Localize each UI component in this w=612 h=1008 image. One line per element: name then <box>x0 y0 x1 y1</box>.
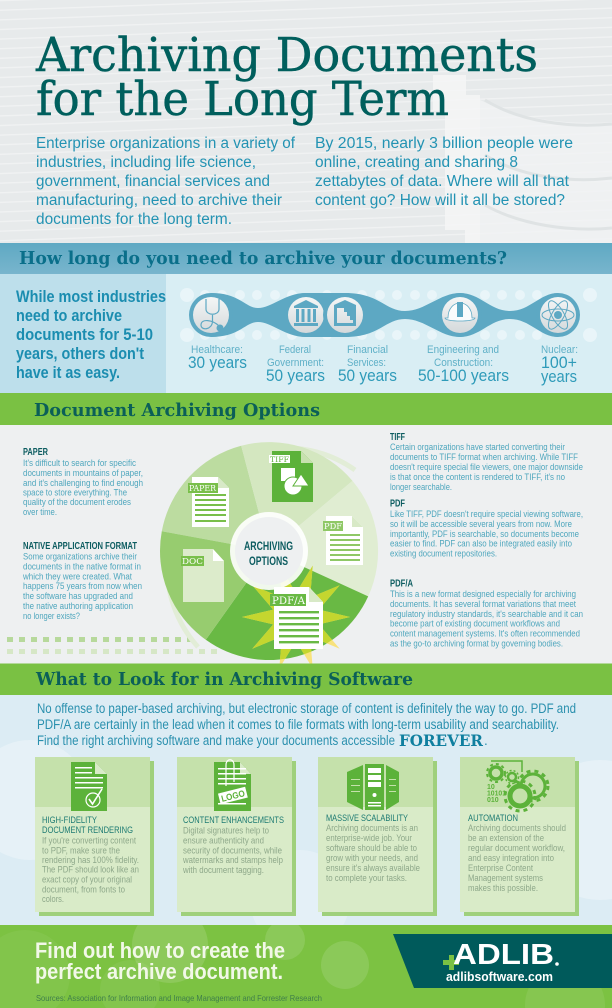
centre label: OPTIONS <box>249 554 288 568</box>
icon: tiff document <box>269 451 313 502</box>
card: automation: and easy integration into <box>468 853 554 863</box>
software intro paragraph: Find the right archiving software and make your documents accessible <box>37 733 395 748</box>
section band: archiving options <box>0 393 612 425</box>
label: engineering and construction: Engineering and <box>427 344 499 356</box>
title: Archiving Documents <box>35 28 538 83</box>
text block: tiff: TIFF <box>390 432 405 443</box>
software intro paragraph: . <box>484 733 488 748</box>
icon: financial building <box>323 293 367 337</box>
text block: native application format: documents in the native format in <box>23 562 141 572</box>
card: high-fidelity rendering: DOCUMENT RENDERING <box>42 825 133 836</box>
text block: native application format: which they were created. What <box>22 572 132 582</box>
icon: hard hat <box>438 293 482 337</box>
text block: pdf: importantly, PDF is searchable, so documents become <box>390 529 579 539</box>
label: nuclear: Nuclear: <box>541 344 578 356</box>
card: massive scalability: grow with your needs, and <box>326 853 418 863</box>
intro text: right column: By 2015, nearly 3 billion people were <box>315 135 573 152</box>
label: financial services <box>338 344 397 385</box>
icon: paper document <box>188 477 229 527</box>
icon: paper document: PAPER <box>189 484 217 494</box>
icon: gears and binary: 10101 <box>487 790 506 798</box>
call to action: perfect archive document. <box>35 959 283 984</box>
intro text: right column <box>315 135 573 209</box>
header background with database motif <box>0 0 612 243</box>
slice: doc <box>160 531 269 640</box>
text block: pdf: existing document repositories. <box>390 548 497 558</box>
intro text: right column: zettabytes of data. Where will all that <box>315 173 570 190</box>
text block: paper <box>23 447 143 517</box>
intro text: right column: content go? How will it all be stored? <box>315 192 565 209</box>
label: financial services: 50 years <box>338 366 397 385</box>
text block: native application format: happens 75 years from now when <box>23 581 142 591</box>
text block: tiff: doesn't require special file viewers, one major downside <box>390 462 583 472</box>
label: nuclear: 100+ <box>541 353 577 372</box>
text block: tiff <box>390 432 583 492</box>
icon: doc document: DOC <box>182 557 203 566</box>
label: federal government <box>266 344 325 385</box>
label: federal government: Federal <box>279 344 311 356</box>
logo banner: ADLIB: adlibsoftware.com <box>446 969 553 984</box>
label: engineering and construction <box>418 344 509 385</box>
text block: pdf/a: PDF/A <box>390 578 413 590</box>
text block: pdf/a: This is a new format designed especially for archiving <box>390 589 576 599</box>
text block: pdf: so it will be accessible several years from now. More <box>390 519 572 529</box>
footer background with bokeh <box>0 925 612 1008</box>
text block: native application format: no longer exists? <box>23 611 80 621</box>
panel: retention intro: have it as easy. <box>16 363 120 382</box>
icon: pdf/a document: PDF/A <box>272 596 306 607</box>
card: massive scalability <box>318 757 437 916</box>
label: nuclear <box>541 344 578 386</box>
section band: software: What to Look for in Archiving Software <box>35 669 413 690</box>
text block: tiff: longer searchable. <box>390 482 452 492</box>
icon: doc document <box>181 549 224 602</box>
label: nuclear: years <box>541 367 577 386</box>
text block: pdf: Like TIFF, PDF doesn't require special viewing software, <box>390 509 583 519</box>
card: automation: Management systems <box>468 873 543 883</box>
card: high-fidelity rendering: colors. <box>42 894 64 904</box>
card: massive scalability: Archiving documents is an <box>326 823 418 833</box>
text block: tiff: is that once the content is rendered to TIFF, it's no <box>390 472 565 482</box>
text block: pdf: easier to find. PDF can also be integrated easily into <box>390 538 572 548</box>
panel: retention intro: years, others don't <box>16 344 144 363</box>
intro text: left column: government, financial services and <box>36 173 270 190</box>
slice: tiff <box>241 442 352 551</box>
text block: tiff: Certain organizations have started converting their <box>390 442 565 452</box>
intro text: left column <box>36 135 296 228</box>
icon: tiff document: TIFF <box>270 456 289 464</box>
panel: retention intro: documents for 5-10 <box>16 325 153 344</box>
software intro paragraph: FOREVER <box>399 731 484 750</box>
call to action <box>35 938 285 984</box>
text block: native application format: the software has upgraded and <box>23 591 133 601</box>
icon: checked document <box>71 762 107 811</box>
text block: native application format <box>22 541 142 621</box>
card: massive scalability: to complete your tasks. <box>326 873 407 883</box>
icon: government building <box>284 293 328 337</box>
text block: native application format: the native authoring application <box>23 601 133 611</box>
centre label: ARCHIVING <box>244 539 293 553</box>
intro text: left column: documents for the long term. <box>36 211 232 228</box>
text block: native application format: NATIVE APPLICATION FORMAT <box>23 541 137 552</box>
intro text: left column: Enterprise organizations in a variety of <box>36 135 296 152</box>
card: massive scalability: enterprise-wide job. Your <box>326 833 412 843</box>
intro text: left column: manufacturing, need to archive their <box>36 192 282 209</box>
card: high-fidelity rendering: rendering has 100% fidelity. <box>42 855 139 865</box>
card: content enhancements: security of documents, while <box>183 846 282 856</box>
icon: atom <box>536 293 580 337</box>
options panel background <box>0 393 612 664</box>
card: automation: Archiving documents should <box>468 823 566 833</box>
icon: pdf document: PDF <box>324 522 342 531</box>
card: content enhancements: ensure authenticity and <box>183 836 264 846</box>
starburst <box>242 566 350 668</box>
icon: document with clip and logo stamp <box>214 760 251 811</box>
chain connector <box>211 293 558 337</box>
label: financial services: Services: <box>347 357 386 369</box>
panel: retention intro: While most industries <box>16 287 166 306</box>
icon: document with clip and logo stamp: LOGO <box>220 788 246 804</box>
sources: Sources: Association for Information and Image Management and Forrester Research <box>36 993 322 1003</box>
text block: pdf/a: become part of existing document workflows and <box>390 618 560 628</box>
card: massive scalability: software should be able to <box>326 843 417 853</box>
label: healthcare: 30 years <box>188 353 247 372</box>
text block: pdf <box>390 498 583 558</box>
title: for the Long Term <box>36 72 449 127</box>
section band: archiving options: Document Archiving Options <box>34 400 320 421</box>
text block: native application format: Some organizations archive their <box>23 552 137 562</box>
text block: paper: quality of the document erodes <box>23 497 131 507</box>
section band: software <box>0 664 612 695</box>
icon: server rack <box>347 764 399 810</box>
text block: pdf/a: documents. It has several format variations that meet <box>390 599 576 609</box>
section band: how long <box>0 243 612 274</box>
text block: paper: space to store everything. The <box>23 488 127 498</box>
text block: pdf/a: content management systems. It's often recommended <box>390 628 580 638</box>
card: automation <box>460 757 579 916</box>
card: massive scalability: MASSIVE SCALABILITY <box>326 813 409 824</box>
label: engineering and construction: Construction: <box>434 357 493 369</box>
intro text: left column: industries, including life science, <box>36 154 256 171</box>
card: content enhancements: Digital signatures help to <box>183 826 269 836</box>
label: federal government: 50 years <box>266 366 325 385</box>
card: high-fidelity rendering: exact copy of your original <box>42 874 132 884</box>
card: automation: makes this possible. <box>468 883 538 893</box>
text block: paper: PAPER <box>23 447 49 458</box>
panel: retention intro <box>0 274 166 393</box>
label: healthcare: Healthcare: <box>191 344 243 356</box>
icon: gears and binary: 10 <box>487 784 495 791</box>
call to action: Find out how to create the <box>35 938 285 963</box>
software intro paragraph <box>37 701 576 750</box>
card: high-fidelity rendering: HIGH-FIDELITY <box>42 815 98 826</box>
icon: pdf document <box>323 516 363 565</box>
intro text: right column: online, creating and sharing 8 <box>315 154 518 171</box>
card: high-fidelity rendering: The PDF should look like an <box>42 864 139 874</box>
card: high-fidelity rendering: to PDF, make sure the <box>42 846 120 856</box>
panel: retention timeline <box>166 274 612 393</box>
title <box>35 28 538 127</box>
card: automation: AUTOMATION <box>468 813 518 824</box>
text block: pdf/a: regulatory industry standards, it's searchable and it can <box>390 609 583 619</box>
text block: paper: over time. <box>23 507 57 517</box>
dotted strip <box>7 637 217 654</box>
card: content enhancements: watermarks and stamps help <box>182 855 283 865</box>
card: automation: Enterprise Content <box>468 863 533 873</box>
card: automation: regular document workflow, <box>468 843 565 853</box>
icon: stethoscope <box>189 293 233 337</box>
text block: pdf/a: as the go-to archiving format by governing bodies. <box>390 638 563 648</box>
panel: retention intro: need to archive <box>16 306 122 325</box>
card: content enhancements: CONTENT ENHANCEMENTS <box>183 815 284 826</box>
label: federal government: Government: <box>267 357 324 369</box>
card: high-fidelity rendering <box>35 757 154 916</box>
icon: plus mark <box>443 955 459 970</box>
section band: how long: How long do you need to archive your documents? <box>19 248 507 269</box>
label: engineering and construction: 50-100 years <box>418 366 509 385</box>
software section background <box>0 695 612 950</box>
text block: paper: and it's challenging to find enough <box>23 478 143 488</box>
text block: paper: documents in mountains of paper, <box>23 468 143 478</box>
card: automation: be an extension of the <box>468 833 544 843</box>
card: high-fidelity rendering: document, from fonts to <box>42 884 125 894</box>
slice: pdf/a <box>206 551 368 660</box>
card: massive scalability: ensure it's always available <box>326 863 420 873</box>
icon: pdf/a document <box>270 587 323 649</box>
centre label <box>230 512 308 590</box>
card: content enhancements <box>177 757 296 916</box>
slice: pdf <box>269 481 378 596</box>
icon: gears and binary: 010 <box>487 797 499 804</box>
pie chart: archiving options <box>160 442 378 668</box>
logo banner: ADLIB <box>393 934 612 988</box>
text block: pdf/a <box>390 578 583 648</box>
card: high-fidelity rendering: If you're converting content <box>42 836 136 846</box>
label: healthcare <box>188 344 247 372</box>
text block: paper: It's difficult to search for specific <box>23 458 136 468</box>
logo banner: ADLIB: ADLIB <box>453 939 554 971</box>
label: financial services: Financial <box>347 344 388 356</box>
card: content enhancements: with document tagging. <box>182 865 264 875</box>
text block: tiff: documents to TIFF format when archiving. While TIFF <box>390 452 578 462</box>
text block: pdf: PDF <box>390 498 405 510</box>
icon: gears and binary <box>487 761 548 811</box>
slice: paper <box>162 446 269 551</box>
